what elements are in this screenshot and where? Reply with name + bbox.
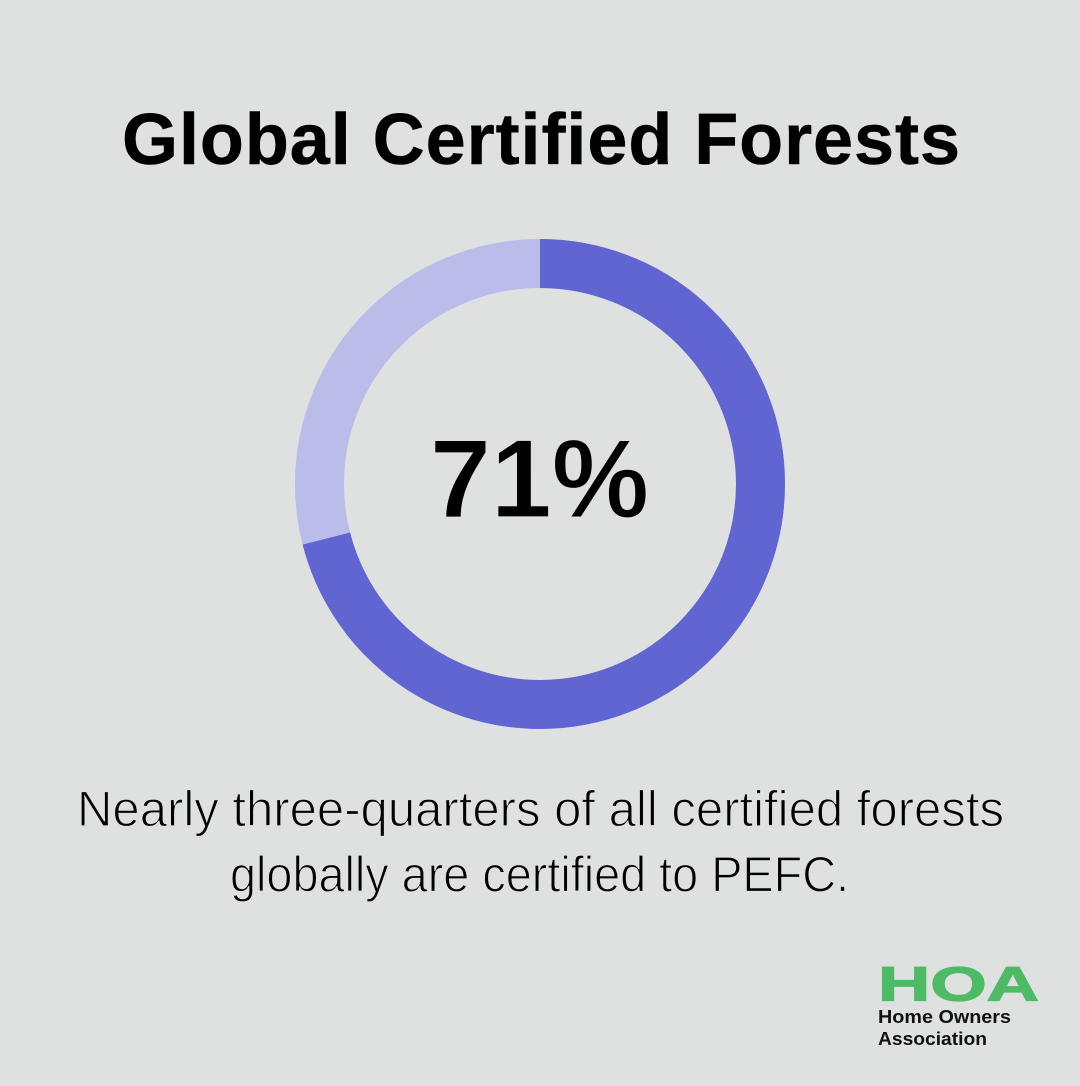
logo: HOA Home Owners Association: Home Owners	[878, 1007, 1011, 1027]
description text: Nearly three-quarters of all certified forests	[77, 781, 1004, 837]
center value: 71%	[430, 417, 649, 541]
donut chart: 71%	[320, 264, 760, 704]
logo: HOA Home Owners Association: Association	[878, 1029, 987, 1049]
description text: globally are certified to PEFC.	[230, 846, 849, 902]
title: Global Certified Forests	[122, 100, 960, 180]
description text	[77, 781, 1004, 902]
logo: HOA Home Owners Association: HOA	[878, 958, 1039, 1012]
logo: HOA Home Owners Association	[878, 958, 1039, 1049]
